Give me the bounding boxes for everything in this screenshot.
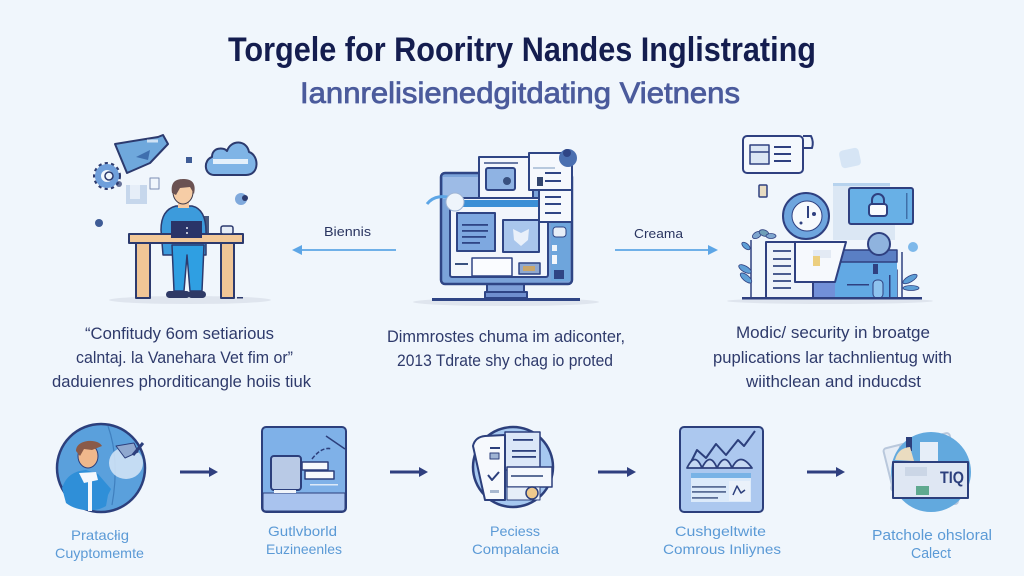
text block: center description: 2013 Tdrate shy chag io proted — [397, 351, 613, 370]
icon: top card — [743, 136, 813, 173]
title: Torgele for Rooritry Nandes Inglistrating — [228, 31, 816, 69]
label: left arrow caption: Biennis — [324, 224, 372, 239]
text block: left description: “Confitudy 6om setiarious — [85, 324, 274, 343]
image card — [503, 220, 539, 252]
icon: battery — [759, 185, 767, 197]
icon: bottle — [115, 135, 168, 173]
label: step 1: Cuyptomemte — [55, 545, 144, 561]
icon: gear — [95, 164, 122, 188]
laptop — [171, 221, 202, 238]
label: step 1: Pratacłig — [71, 527, 129, 543]
illustration: security workspace — [727, 136, 933, 304]
icon: clock — [783, 193, 829, 239]
stand — [432, 284, 580, 301]
curved arrow and badge — [427, 193, 464, 211]
text block: left description: calntaj. la Vanehara Vet fim or” — [76, 348, 293, 367]
document overlay — [529, 153, 572, 222]
plants — [737, 228, 919, 298]
label: step 2 — [266, 523, 342, 557]
monitor body — [441, 173, 572, 284]
side strip — [551, 223, 570, 281]
step 2: square monitor icon — [262, 427, 346, 512]
dot — [908, 242, 918, 252]
open folder — [795, 242, 846, 282]
arrow: right — [615, 245, 718, 255]
mug — [221, 226, 233, 234]
arrow: step 2 to 3 — [390, 467, 428, 477]
step 3: circular checklist icon — [473, 427, 553, 507]
label: step 2: Euzineenles — [266, 541, 342, 557]
icon: cloud — [206, 142, 257, 175]
document — [766, 242, 813, 298]
text block: center description: Dimmrostes chuma im adiconter, — [387, 327, 625, 346]
label: step 3: Peciess — [490, 523, 540, 539]
label: step 3 — [472, 523, 559, 557]
icon: puzzle — [838, 147, 862, 169]
step 1: circular person icon — [57, 424, 145, 512]
arrow: left — [292, 245, 396, 255]
text block: right description: puplications lar tachnlientug with — [713, 348, 952, 367]
icon: data block — [126, 178, 159, 204]
text block: center description — [387, 327, 625, 370]
bottom tiles — [455, 258, 540, 276]
step 4: square chart icon — [680, 427, 763, 512]
icon: user group badge — [559, 149, 577, 167]
arrow: step 4 to 5 — [807, 467, 845, 477]
label: step 1 — [55, 527, 144, 561]
label: step 5: Patchole ohsloral — [872, 527, 992, 544]
illustration: monitor — [413, 149, 599, 306]
top panel — [479, 157, 533, 198]
label: right arrow caption: Creama — [634, 226, 684, 241]
text block: right description — [713, 323, 952, 391]
step 5: folder and cards icon — [883, 432, 971, 512]
text block: right description: wiithclean and inducdst — [745, 372, 921, 391]
desk — [129, 234, 243, 298]
label: step 5: Calect — [911, 545, 952, 562]
label: step 3: Compalancia — [472, 541, 559, 557]
text block: left description — [52, 324, 311, 391]
lock backing panel — [833, 183, 895, 240]
ground line — [742, 297, 922, 300]
illustration: person at desk — [95, 135, 271, 304]
globe badge — [868, 233, 890, 255]
text card — [457, 213, 495, 251]
label: step 2: Gutlvborld — [268, 523, 337, 539]
label: step 4: Comrous Inliynes — [663, 541, 781, 557]
small floating icons — [95, 157, 248, 227]
text block: right description: Modic/ security in broatge — [736, 323, 930, 342]
person — [161, 179, 209, 298]
label: step 4 — [663, 523, 781, 557]
icon: lock card — [849, 188, 913, 224]
label: step 5 — [872, 527, 992, 562]
label: step 4: Cushgeltwite — [675, 523, 766, 539]
text block: left description: daduienres phorditicangle hoiis tiuk — [52, 372, 311, 391]
arrow: step 1 to 2 — [180, 467, 218, 477]
blue cabinet — [813, 250, 897, 298]
arrow: step 3 to 4 — [598, 467, 636, 477]
step 5: folder and cards icon: TIQ — [940, 468, 964, 487]
subtitle: Iannrelisienedgitdating Vietnens — [300, 77, 740, 110]
